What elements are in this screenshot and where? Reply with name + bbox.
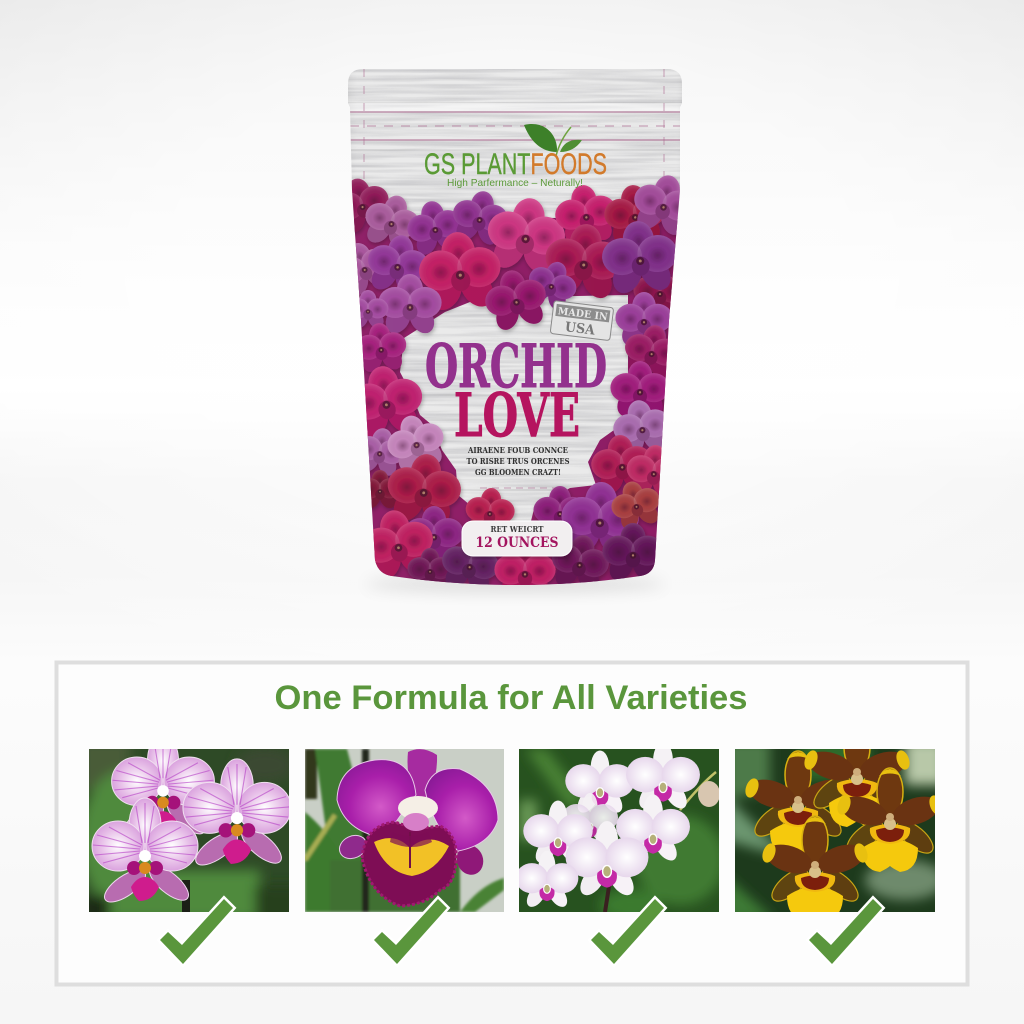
orchid heart wreath (352, 175, 680, 585)
panel: one formula (56, 662, 968, 984)
icon: check 2 (374, 899, 447, 964)
pouch description (466, 446, 570, 478)
net weight badge (462, 521, 572, 556)
stamp: made in usa: USA (564, 319, 596, 339)
pouch description: TO RISRE TRUS ORCENES (466, 457, 570, 467)
icon: check 3 (591, 899, 664, 964)
brand logo (424, 124, 607, 189)
net weight badge: 12 OUNCES (476, 535, 558, 551)
icon: check 1 (160, 899, 233, 964)
icon: check 4 (809, 899, 882, 964)
tagline: High Parfermance – Neturally! (447, 177, 583, 189)
photo: cattleya (305, 749, 504, 912)
stamp: made in usa (550, 301, 614, 341)
brand name: GS PLANTFOODS (424, 148, 607, 181)
photo: white phalaenopsis (519, 749, 719, 912)
net weight badge: RET WEICRT (490, 524, 544, 534)
product title: ORCHID (425, 332, 607, 402)
product pouch (348, 69, 682, 585)
stamp: made in usa: MADE IN (557, 306, 608, 323)
panel heading: One Formula for All Varieties (274, 679, 748, 717)
product title (425, 332, 607, 451)
icon: leaves (524, 124, 582, 156)
pouch description: AIRAENE FOUB CONNCE (467, 446, 568, 456)
pouch description: GG BLOOMEN CRAZT! (475, 468, 561, 478)
photo: phalaenopsis (89, 749, 289, 912)
product title: LOVE (454, 381, 580, 451)
photo: oncidium (735, 749, 935, 912)
